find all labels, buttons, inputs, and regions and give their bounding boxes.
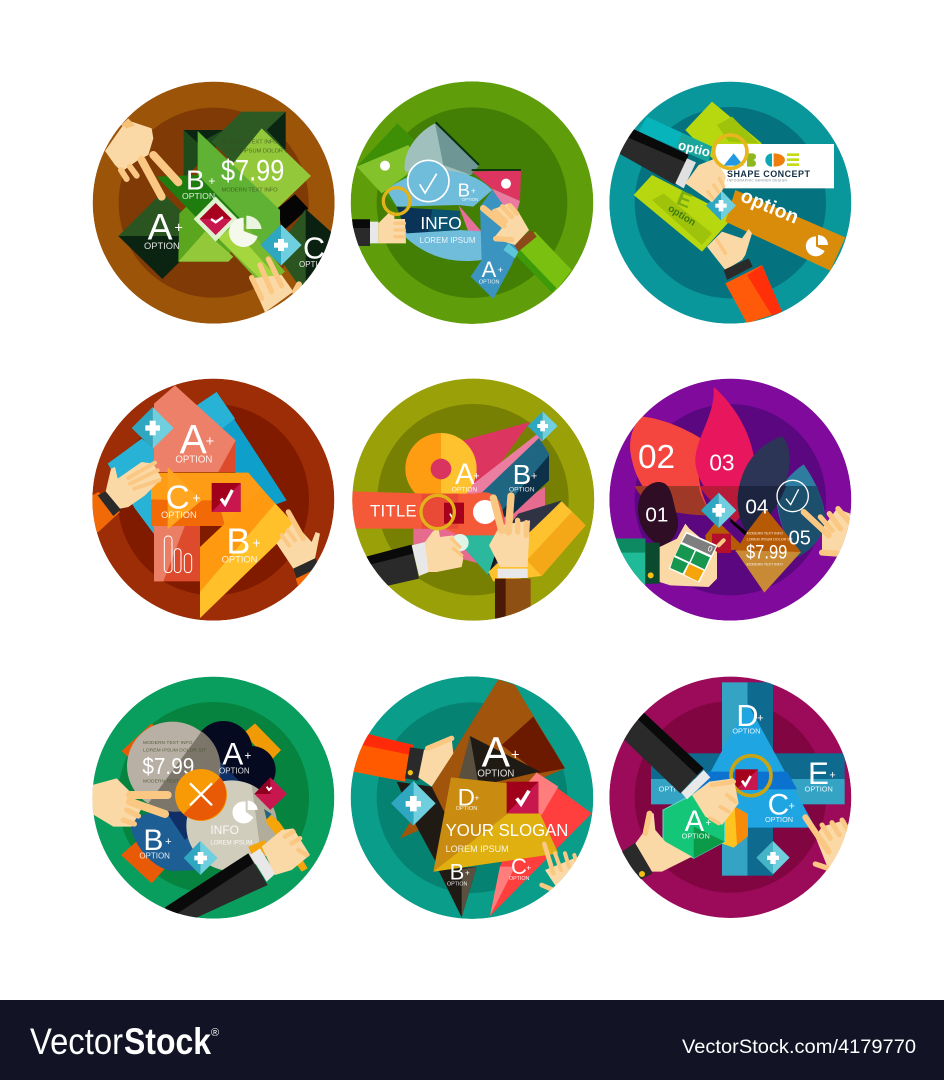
panel: badge 3 shape concept [609, 82, 851, 324]
hand: calculator: 0 [706, 544, 714, 554]
text: C plus option: C [166, 480, 190, 517]
icon: plus diamond [391, 781, 436, 826]
text: price block: $7.99 [746, 543, 787, 564]
text: C plus option: + [526, 864, 531, 873]
text: A plus option [144, 214, 182, 249]
text: your slogan: YOUR SLOGAN [446, 820, 568, 840]
text: price block: $7.99 [142, 753, 194, 779]
text: C plus option: OPTION [161, 510, 197, 520]
grey circle [127, 722, 220, 812]
text: B plus option: OPTION [447, 881, 468, 887]
orange arrow [151, 467, 275, 529]
text: price block [746, 532, 794, 566]
text: brand logo: Vector [30, 1021, 123, 1062]
text: B plus [459, 184, 478, 201]
icon: pie chart [806, 235, 828, 256]
hand: bottom right [542, 844, 583, 890]
text: D plus option: + [757, 713, 764, 725]
red ribbon [351, 491, 505, 535]
sleeve right [503, 230, 572, 292]
blue folded shapes [108, 392, 287, 535]
text: lorem ipsum: LOREM IPSUM [420, 236, 476, 245]
text: A plus option [477, 729, 520, 780]
text: price block: LOREM IPSUM DOLOR SIT [143, 747, 206, 753]
hand: pointing right [483, 203, 529, 245]
text: B plus option: OPTION [182, 191, 215, 201]
panel: badge 5 title ribbon [351, 378, 594, 621]
hand: pointing right [804, 509, 850, 557]
icon: check square [735, 769, 758, 790]
panel: badge 4 arrows [92, 379, 334, 621]
icon: plus diamond [260, 224, 302, 266]
blue circle [130, 810, 198, 871]
text: A plus option: A [222, 736, 243, 771]
text: C option [299, 237, 324, 267]
orange band [725, 190, 845, 271]
text: B plus option: OPTION [139, 851, 170, 860]
text: hidden left option: OPTI [659, 785, 676, 794]
text: C plus option: + [192, 490, 201, 506]
icon: check circle [408, 160, 449, 202]
text: price: $7.99 [221, 154, 284, 187]
text: B plus option: B [226, 520, 250, 561]
text: small modern info lines: MODERN TEXT INFO [222, 140, 278, 146]
orange hexagon [721, 807, 748, 848]
text: B plus option: B [143, 824, 163, 857]
text: B plus option [182, 170, 215, 199]
text: A plus option: A [455, 458, 475, 491]
text: A plus option: OPTION [682, 831, 710, 840]
text: D plus option: D [458, 784, 475, 811]
text: price block [142, 740, 206, 785]
lower red panel [154, 525, 200, 581]
blue ribbon [471, 190, 518, 299]
text: A plus option [219, 736, 251, 775]
yellow arrow [200, 489, 296, 618]
green band with pie [356, 124, 414, 204]
text: B plus: B [458, 179, 470, 200]
hand: left sleeve [353, 733, 453, 787]
text: C plus option: OPTION [509, 876, 530, 882]
leaf 02 [630, 416, 712, 515]
text: A plus option [175, 416, 214, 466]
text: B plus option: + [165, 836, 172, 848]
icon: plus diamond [701, 493, 736, 528]
green ribbon shapes [157, 128, 311, 288]
text: E option: E [673, 187, 695, 213]
text: A plus option: OPTION [477, 769, 514, 780]
hand: two fingers [489, 496, 531, 619]
salmon panel [154, 385, 236, 472]
hand: calculator [616, 524, 724, 587]
text: E option: option [666, 203, 697, 229]
text: A plus option: + [206, 434, 214, 450]
text: small modern info lines [222, 140, 290, 193]
hand: left [92, 462, 162, 532]
icon: pie [451, 534, 469, 551]
text: brand logo [30, 1021, 219, 1062]
text: number labels: 05 [789, 528, 811, 550]
text: B plus option: B [513, 459, 531, 490]
text: A plus option: OPTION [452, 486, 477, 493]
text: B plus option [139, 824, 172, 860]
text: C plus option: OPTION [765, 815, 793, 824]
text: info [210, 823, 252, 847]
brown triangle [400, 679, 565, 838]
text: option teal: optio [677, 137, 712, 160]
leaf 04 [738, 436, 789, 532]
text: A plus [479, 262, 503, 284]
light grey circle [186, 780, 277, 871]
icon: pencil [264, 809, 308, 872]
icon: pie chart [229, 216, 262, 247]
background rings [92, 677, 334, 919]
footer bar [0, 1000, 944, 1080]
icon: pie [232, 801, 258, 823]
icon: white circle [473, 500, 497, 524]
white title box [715, 144, 834, 188]
text: A plus option: + [473, 470, 480, 482]
text: A plus option: A [482, 729, 511, 777]
hand: bottom left [622, 812, 692, 881]
icon: check diamond [194, 197, 238, 242]
text: D plus option: D [736, 699, 758, 733]
text: E plus option: + [829, 770, 836, 782]
dark info banner [397, 207, 460, 233]
background rings [609, 82, 851, 324]
lime bands [634, 102, 762, 252]
text: B plus option [509, 459, 537, 493]
text: info: INFO [210, 823, 239, 837]
dark green diamonds [118, 112, 332, 285]
dark triangles [397, 736, 540, 917]
text: image url: VectorStock.com/4179770 [682, 1036, 916, 1058]
text: info: INFO [420, 213, 462, 233]
text: number labels: 04 [745, 496, 768, 519]
text: A plus option: + [244, 748, 251, 762]
orange diamonds [121, 723, 281, 883]
background rings [609, 676, 851, 918]
leaf 05 [777, 464, 825, 557]
icon: plus diamond [706, 190, 736, 221]
text: D plus option: OPTION [732, 727, 760, 736]
text: A plus option: OPTION [175, 455, 212, 466]
text: brand logo: Stock [124, 1021, 211, 1062]
text: price block: MODERN TEXT INFO [143, 740, 193, 746]
text: option orange: option [737, 186, 802, 229]
pink panels [413, 422, 545, 565]
light blue lens [387, 171, 492, 261]
text: B plus option: B [450, 859, 464, 884]
brown diamonds [705, 508, 801, 593]
text: A plus option: + [705, 818, 711, 829]
text: C plus option [765, 788, 795, 824]
text: small modern info lines: MODERN TEXT INFO [222, 187, 278, 193]
text: A plus: OPTION [479, 279, 500, 285]
text: tagline: INFOGRAPHIC BANNER DESIGN [727, 179, 788, 183]
leaf 03 [695, 387, 755, 522]
pink shape with pie [458, 170, 521, 232]
text: number labels: 01 [645, 503, 668, 526]
icon: check diamond [254, 777, 287, 810]
icon: check square [444, 503, 464, 524]
icon: plus diamond [132, 407, 174, 449]
green hexagon [663, 794, 725, 858]
text: A plus option: A [148, 206, 173, 248]
text: A plus: + [498, 265, 503, 275]
background rings [351, 81, 593, 324]
icon: plus diamond [528, 411, 558, 441]
panel: badge 7 circles [92, 677, 334, 919]
hand: pointing right [805, 817, 850, 870]
text: price block: MODERN TEXT INFO [143, 779, 193, 785]
text: B plus option [447, 859, 470, 887]
icon: plus diamond [184, 841, 218, 875]
text: D plus option: OPTION [456, 806, 477, 812]
hand: two fingers left [92, 778, 168, 827]
hand: top left pointing [105, 118, 178, 197]
background rings [92, 379, 334, 621]
blue triangle [680, 703, 815, 828]
hand: holding magnifier [352, 188, 410, 246]
text: C plus option: C [511, 854, 527, 879]
text: A plus option: A [180, 416, 208, 462]
yellow band [488, 501, 586, 581]
text: B plus option: OPTION [222, 555, 257, 565]
text: B plus option: + [531, 470, 537, 482]
text: C plus option: C [768, 788, 789, 821]
text: lorem ipsum: LOREM IPSUM [446, 844, 509, 854]
icon: check square [212, 483, 241, 512]
text: small modern info lines: LOREM IPSUM DOLOR SI [222, 148, 290, 154]
text: B plus option: + [465, 868, 470, 877]
hand: bottom right [250, 259, 299, 312]
text: B plus option: OPTION [509, 486, 535, 493]
text: number labels: 02 [638, 439, 675, 476]
teal and dark panels [458, 500, 562, 575]
text: E plus option: OPTION [805, 784, 833, 793]
text: number labels: 03 [709, 450, 735, 476]
red triangle [490, 773, 592, 916]
background rings [93, 82, 335, 324]
text: A plus option: A [685, 805, 705, 838]
text: C plus option: + [789, 800, 795, 812]
hand: bottom reaching [707, 229, 782, 323]
hand: right [277, 512, 320, 587]
text: price block: MODERN TEXT INFO [747, 562, 783, 566]
text: B plus option: B [186, 165, 205, 196]
text: C option: C [303, 231, 325, 265]
text: A plus option: OPTION [219, 766, 250, 775]
icon: plus diamond [756, 841, 790, 874]
icon: magnifier ring [731, 756, 771, 796]
text: D plus option: + [474, 793, 479, 803]
text: A plus option: OPTION [144, 241, 180, 251]
text: D plus option [732, 699, 764, 736]
blue cross [651, 682, 845, 876]
text: C option: OPTI [299, 260, 318, 269]
hand: dark sleeve with magnifier [623, 712, 739, 825]
text: B plus option: + [208, 174, 215, 188]
text: E plus option [805, 756, 836, 793]
panel: badge 9 cross [609, 676, 851, 918]
text: price block: MODERN TEXT INFO [747, 532, 783, 536]
text: price block: LOREM IPSUM DOLOR SIT [747, 538, 794, 542]
panel: badge 8 your slogan [351, 676, 593, 919]
hand: magnifier [365, 495, 463, 586]
icon: check square [507, 782, 538, 813]
grey teal leaf [405, 122, 479, 175]
icon: X circle [175, 769, 227, 821]
text: brand logo: ® [211, 1027, 219, 1039]
icon: bar pills [164, 536, 192, 573]
text: shape concept: SHAPE CONCEPT [727, 169, 810, 179]
icon: red square [712, 534, 731, 553]
teal band [639, 117, 712, 162]
background rings [352, 378, 594, 621]
panel: badge 1 price diamonds [93, 82, 335, 324]
dark blue panel [478, 438, 549, 519]
panel: badge 6 leaves [609, 379, 851, 621]
text: number labels [638, 439, 811, 550]
text: title: TITLE [370, 502, 417, 521]
text: B plus: + [471, 187, 476, 196]
text: C plus option [161, 480, 201, 520]
gold banner [433, 777, 558, 872]
logo letters [724, 153, 799, 167]
dark circles [194, 721, 276, 794]
background rings [609, 379, 851, 621]
text: A plus: A [482, 257, 497, 282]
text: A plus option [452, 458, 480, 493]
text: A plus option: + [174, 220, 183, 236]
icon: check circle [777, 480, 808, 512]
text: B plus: OPTION [462, 197, 478, 202]
background rings [351, 676, 593, 919]
yellow donut [405, 433, 477, 504]
text: A plus option [682, 805, 711, 840]
text: E plus option: E [808, 756, 829, 791]
text: C plus option [509, 854, 531, 882]
panel: badge 2 info lens [351, 81, 593, 324]
hand: pen with sleeve [165, 828, 310, 918]
leaf 01 [638, 482, 678, 547]
text: info: LOREM IPSUM [210, 841, 252, 847]
text: A plus option: + [511, 747, 520, 763]
text: E option [666, 187, 697, 229]
text: B plus option: + [252, 534, 261, 550]
hand: top with magnifier [619, 128, 747, 202]
text: B plus option [222, 520, 261, 565]
